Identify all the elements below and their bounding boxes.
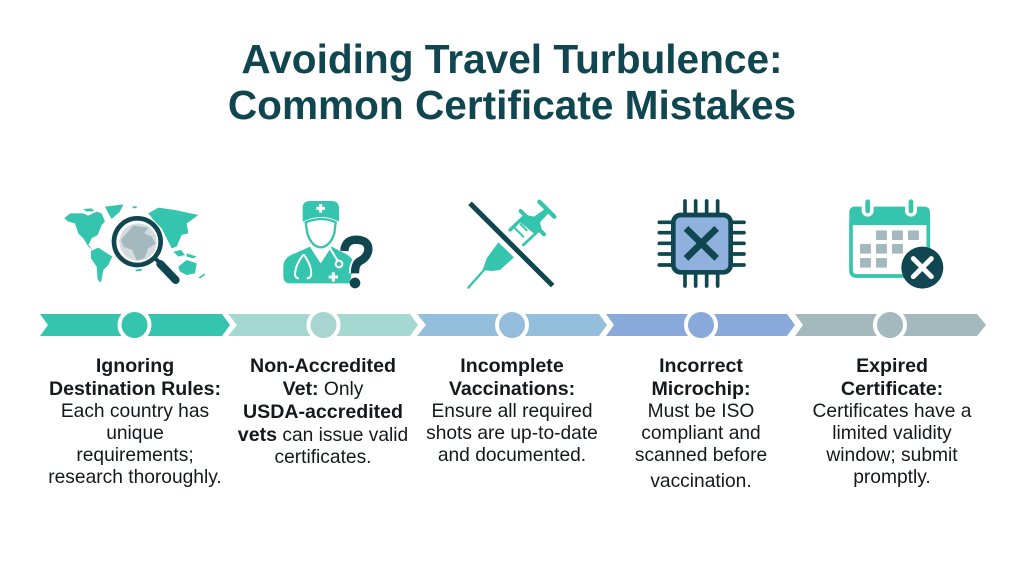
text block: ignoring destination rules: unique [106, 423, 164, 444]
text block: expired certificate: Certificate: [841, 378, 943, 400]
text block: expired certificate: promptly. [853, 467, 931, 488]
text block: incomplete vaccinations: shots are up-to-date [426, 423, 598, 444]
icon: microchip with X [659, 201, 744, 286]
text block: incorrect microchip: scanned before [635, 445, 767, 466]
text block: non-accredited vet: Vet: Only [283, 378, 363, 400]
icon: calendar with X badge [849, 197, 943, 289]
text block: expired certificate: window; submit [826, 445, 958, 466]
text block: ignoring destination rules: Each country has [61, 401, 209, 422]
icon: crossed-out syringe [468, 202, 554, 288]
text block: ignoring destination rules: Ignoring [96, 355, 174, 377]
text block: incomplete vaccinations: Incomplete [460, 355, 564, 377]
text block: ignoring destination rules [48, 355, 222, 488]
text block: incorrect microchip: Must be ISO [648, 401, 754, 422]
text block: ignoring destination rules: research thoroughly. [48, 467, 222, 488]
text block: expired certificate [813, 355, 972, 488]
text block: non-accredited vet: USDA-accredited [243, 401, 403, 423]
title: Common Certificate Mistakes [228, 82, 796, 128]
text block: incomplete vaccinations: and documented. [438, 445, 586, 466]
text block: ignoring destination rules: requirements; [76, 445, 194, 466]
segment 4 [606, 310, 795, 340]
text block: incorrect microchip [635, 355, 767, 492]
segment 5 [795, 310, 986, 340]
icon: world map with magnifying glass [64, 204, 205, 282]
text block: incomplete vaccinations [426, 355, 598, 466]
text block: expired certificate: limited validity [832, 423, 952, 444]
text block: expired certificate: Expired [856, 355, 928, 377]
title [228, 36, 796, 128]
text block: non-accredited vet: vets can issue valid [238, 424, 408, 446]
text block: incorrect microchip: compliant and [641, 423, 761, 444]
segment 3 [417, 310, 607, 340]
text block: ignoring destination rules: Destination Rules: [49, 378, 221, 400]
segment 2 [228, 310, 418, 340]
text block: incorrect microchip: Incorrect [659, 355, 743, 377]
segment 1 [40, 310, 230, 340]
text block: non-accredited vet [238, 355, 408, 468]
text block: non-accredited vet: certificates. [274, 447, 372, 468]
text block: non-accredited vet: Non-Accredited [250, 355, 396, 377]
text block: incorrect microchip: Microchip: [651, 378, 751, 400]
text block: expired certificate: Certificates have a [813, 401, 971, 422]
title: Avoiding Travel Turbulence: [241, 36, 783, 82]
text block: incomplete vaccinations: Ensure all required [431, 401, 593, 422]
text block: incomplete vaccinations: Vaccinations: [449, 378, 575, 400]
text block: incorrect microchip: vaccination. [650, 471, 752, 492]
icon: doctor with question mark [283, 201, 368, 288]
timeline arrow bar [40, 310, 986, 340]
